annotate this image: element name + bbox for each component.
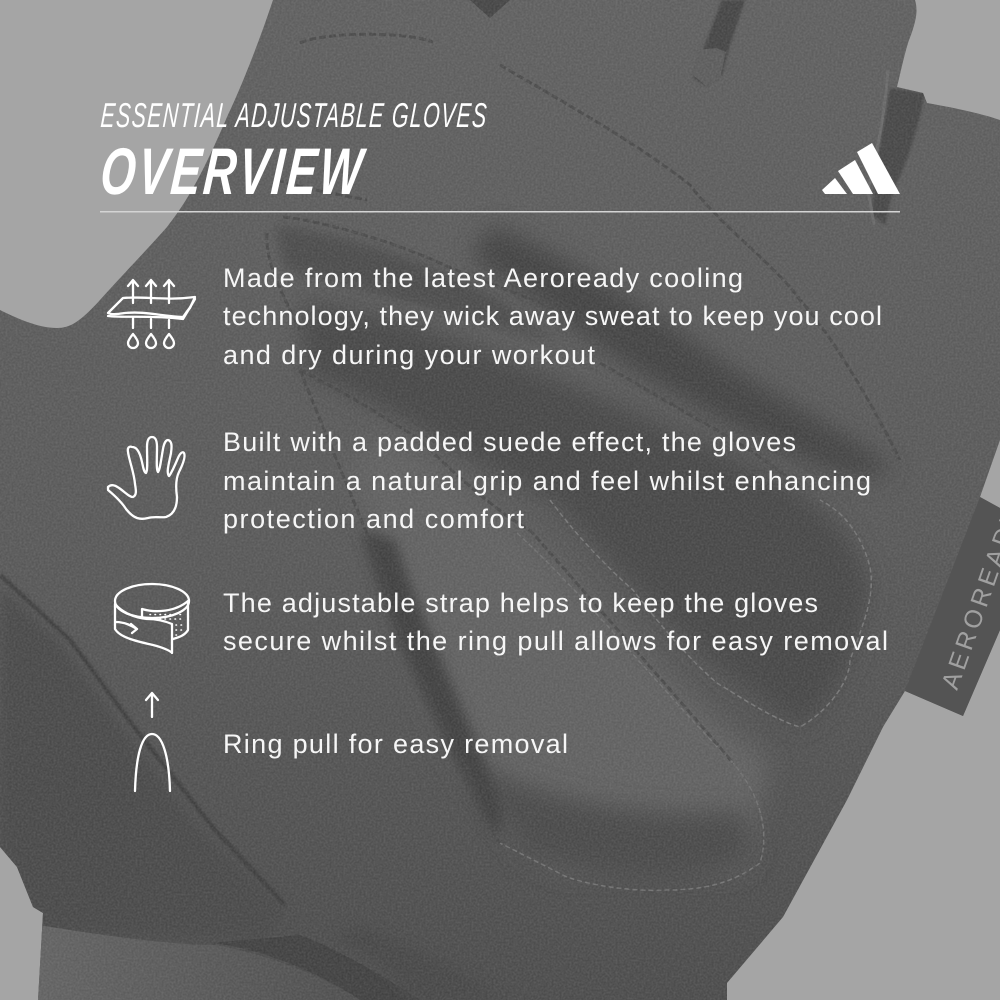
icon: ring pull: [135, 693, 170, 791]
header: [98, 97, 900, 212]
feature: cooling: [108, 263, 891, 370]
icon: hand: [108, 437, 185, 519]
icon: moisture wicking fabric: [108, 280, 195, 348]
text: grip: Built with a padded suede effect, the gloves: [223, 427, 796, 457]
text: grip: maintain a natural grip and feel whilst enhancing: [223, 466, 871, 496]
feature: ring pull: [135, 693, 568, 791]
feature: grip: [108, 427, 880, 534]
title: OVERVIEW: [98, 135, 369, 208]
header rule: [100, 211, 900, 212]
text: ring pull: Ring pull for easy removal: [223, 729, 568, 759]
icon: strap: [115, 584, 189, 653]
adidas logo: [822, 143, 900, 194]
text: strap: The adjustable strap helps to keep the gloves: [223, 588, 818, 618]
text: cooling: technology, they wick away sweat to keep you cool: [223, 301, 882, 331]
text: cooling: Made from the latest Aeroready cooling: [223, 263, 743, 293]
text: grip: protection and comfort: [223, 504, 524, 534]
feature: strap: [115, 584, 888, 656]
subtitle: ESSENTIAL ADJUSTABLE GLOVES: [99, 97, 488, 135]
text: cooling: and dry during your workout: [223, 340, 595, 370]
woven tag: [905, 497, 1000, 716]
text: strap: secure whilst the ring pull allows for easy removal: [223, 626, 888, 656]
